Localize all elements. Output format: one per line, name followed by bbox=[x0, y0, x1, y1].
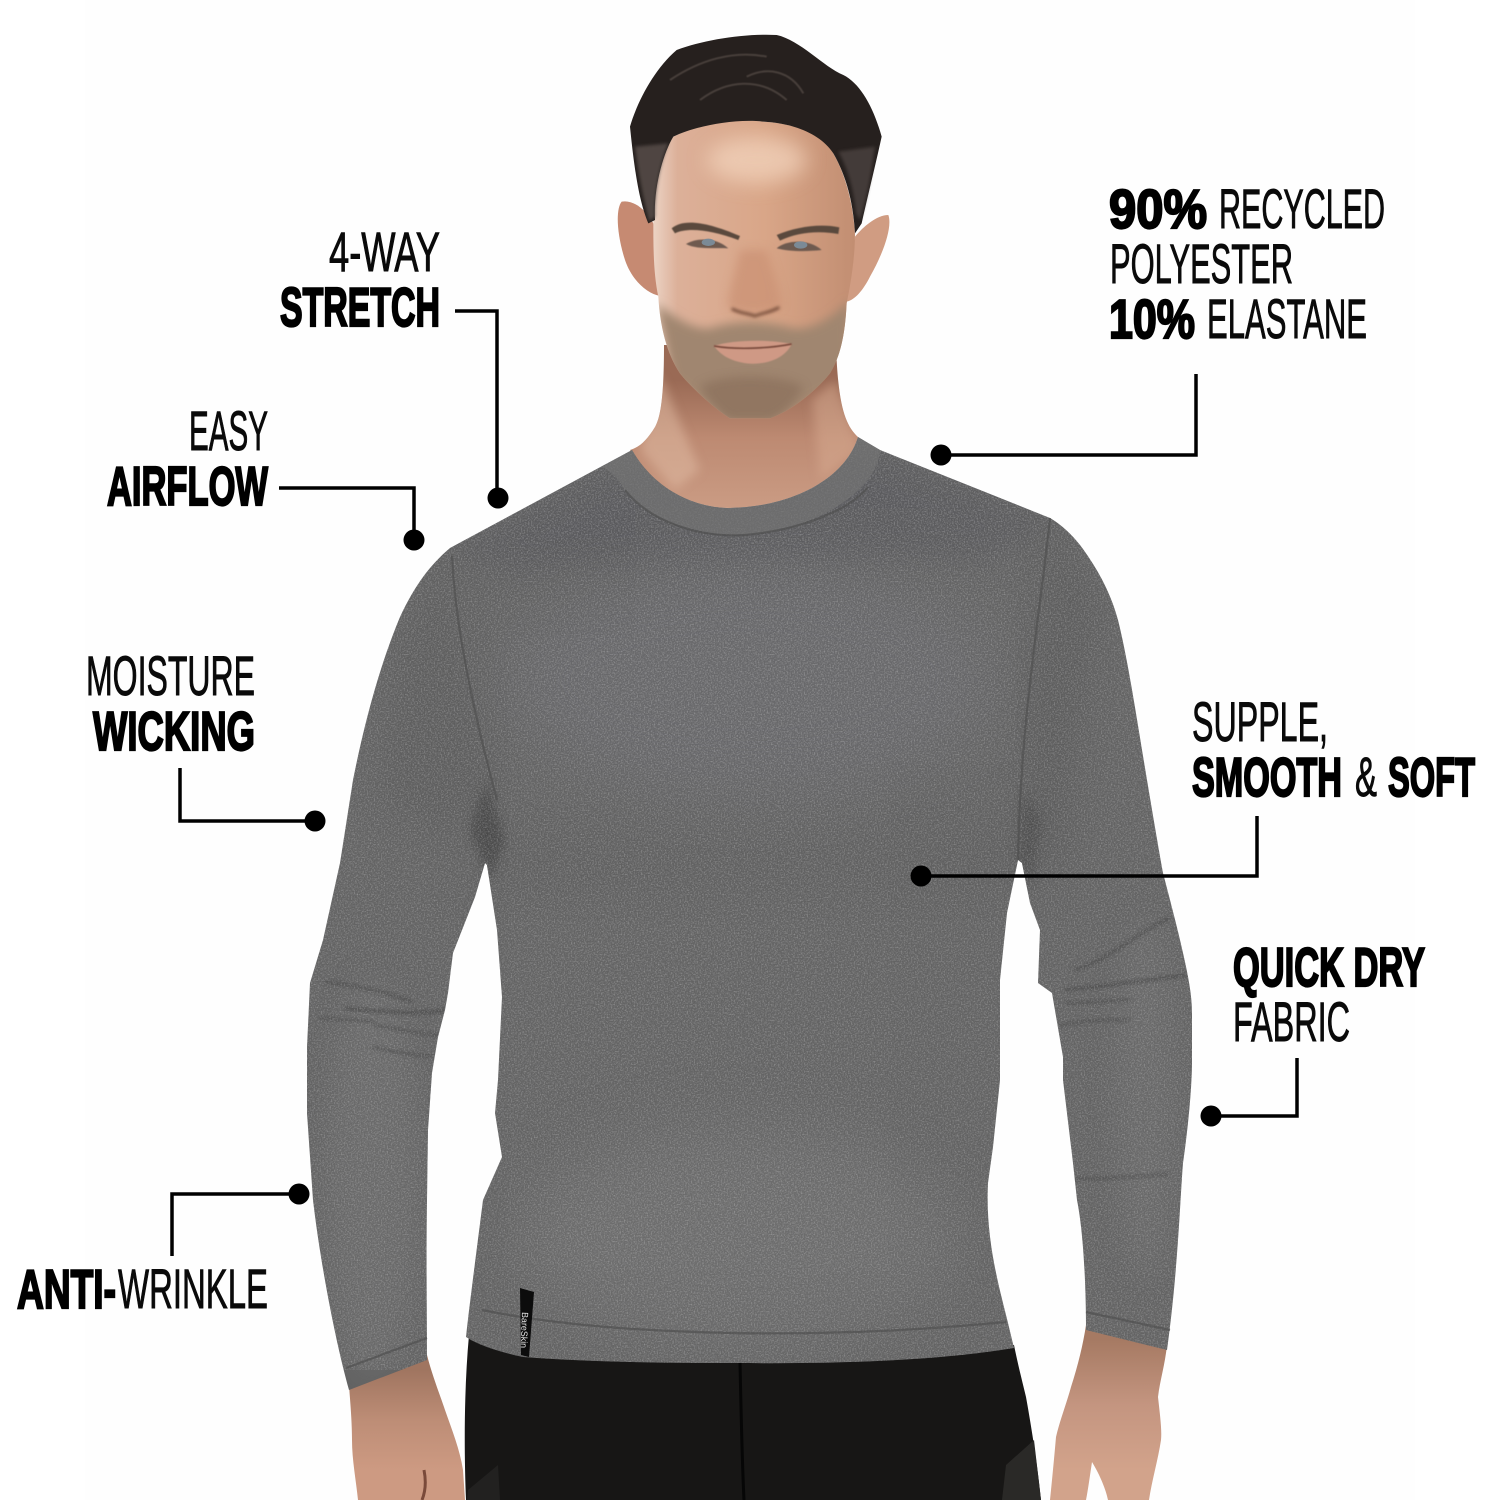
mouth bbox=[714, 341, 792, 364]
right ear bbox=[847, 215, 889, 302]
left eye bbox=[686, 239, 728, 248]
hair left side bbox=[635, 143, 668, 222]
pants bbox=[465, 1335, 1041, 1500]
callout: fabric composition: ELASTANE bbox=[1207, 287, 1367, 350]
callout: supple, smooth & soft: SMOOTH bbox=[1192, 746, 1342, 808]
callout: 4-way stretch: 4-WAY bbox=[329, 220, 440, 283]
nose bbox=[728, 250, 782, 313]
left ear bbox=[618, 201, 660, 296]
callout: 4-way stretch: STRETCH bbox=[280, 276, 440, 338]
hair right side bbox=[838, 147, 875, 220]
callout: quick dry fabric bbox=[1200, 936, 1425, 1126]
shirt shading bbox=[465, 450, 1038, 545]
hem tag with brand: BareSkin bbox=[519, 1312, 530, 1348]
callout: anti-wrinkle: WRINKLE bbox=[118, 1257, 268, 1320]
right eye bbox=[777, 242, 822, 251]
callout: anti-wrinkle bbox=[17, 1184, 310, 1320]
seams bbox=[346, 487, 1170, 1368]
forehead highlight bbox=[707, 137, 807, 183]
callout: easy airflow: EASY bbox=[189, 399, 268, 462]
fabric speckle bbox=[300, 430, 1200, 1370]
man photo illustration bbox=[300, 35, 1200, 1500]
callout: moisture wicking bbox=[86, 644, 326, 832]
callout: supple, smooth & soft bbox=[910, 690, 1475, 886]
callout: fabric composition: 90% bbox=[1109, 178, 1207, 240]
stubble bbox=[657, 300, 850, 423]
elbow wrinkles bbox=[320, 918, 1187, 1179]
callout: moisture wicking: WICKING bbox=[93, 700, 255, 762]
callout: moisture wicking: MOISTURE bbox=[86, 644, 255, 707]
fabric dark speckle bbox=[412, 795, 1150, 1178]
callout: fabric composition: 10% bbox=[1109, 288, 1195, 350]
left eyebrow bbox=[672, 223, 740, 240]
callout: supple, smooth & soft: & bbox=[1355, 745, 1377, 808]
left hand bbox=[349, 1355, 465, 1500]
callout: anti-wrinkle: ANTI- bbox=[17, 1258, 116, 1320]
callout: fabric composition bbox=[930, 177, 1385, 466]
callout: easy airflow bbox=[107, 399, 424, 550]
right hand bbox=[1050, 1325, 1167, 1500]
callout: supple, smooth & soft: SUPPLE, bbox=[1192, 690, 1328, 753]
hair strands bbox=[670, 55, 803, 100]
callout: 4-way stretch bbox=[280, 220, 508, 508]
chin stubble bbox=[700, 377, 803, 420]
callout: easy airflow: AIRFLOW bbox=[107, 455, 268, 517]
hair bbox=[630, 35, 882, 233]
callout: quick dry fabric: FABRIC bbox=[1233, 990, 1350, 1053]
right eyebrow bbox=[777, 226, 839, 241]
head bbox=[618, 35, 889, 423]
shirt bbox=[300, 430, 1200, 1390]
neck bbox=[630, 345, 860, 508]
collar bbox=[602, 437, 880, 535]
hem tag with brand bbox=[519, 1288, 534, 1357]
callout: fabric composition: POLYESTER bbox=[1110, 232, 1293, 295]
face bbox=[653, 121, 855, 418]
